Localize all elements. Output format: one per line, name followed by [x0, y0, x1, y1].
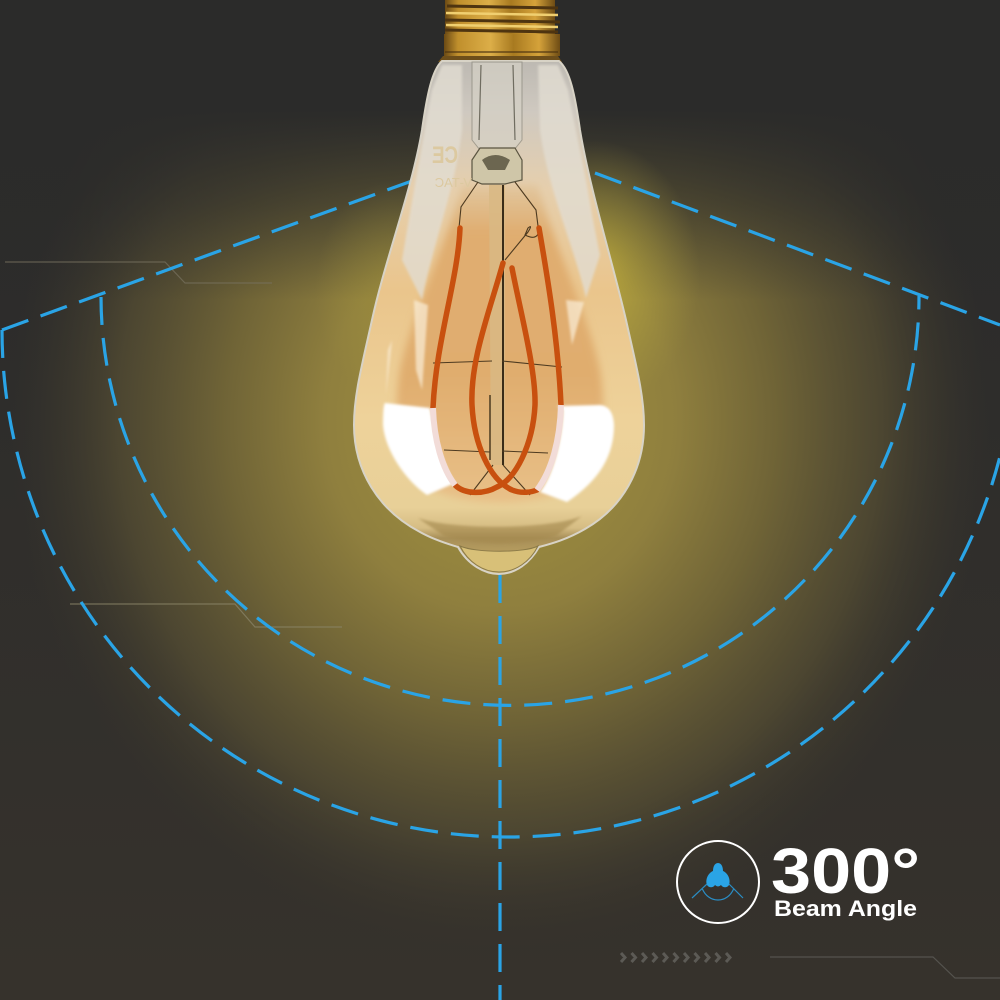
- centre axis: [498, 575, 502, 1000]
- support stem: [489, 185, 505, 465]
- screw base: [438, 0, 562, 62]
- right beam edge: [595, 173, 1000, 325]
- support wires: [433, 182, 562, 495]
- left beam edge: [2, 178, 420, 330]
- glass envelope: [354, 61, 644, 574]
- decorative circuit line: lower left: [70, 604, 342, 627]
- CE marking: CE: [432, 142, 458, 169]
- white glare left: [383, 403, 455, 495]
- decorative circuit line: bottom right: [770, 957, 1000, 978]
- pale streaks: [386, 300, 584, 395]
- filament mount: [472, 148, 522, 184]
- exhaust tube: [472, 62, 522, 150]
- stat: 300 degrees: 300°: [771, 835, 920, 907]
- side reflections: [402, 65, 600, 300]
- icon: beam angle: [677, 841, 759, 923]
- amber core of glass: [397, 185, 603, 502]
- white glare right: [540, 405, 614, 502]
- decorative circuit line: upper left: [5, 262, 272, 283]
- outer arc: [2, 330, 1000, 837]
- glass tip: [460, 546, 538, 572]
- brand marking: V-TAC: [435, 175, 472, 190]
- orange filament: [433, 228, 561, 492]
- filament glow section: [433, 405, 561, 490]
- inner arc: [101, 296, 919, 705]
- stat label: Beam Angle: Beam Angle: [774, 896, 917, 921]
- light bulb: [354, 0, 644, 574]
- decorative chevrons: [621, 953, 730, 962]
- base rim of glass: [418, 516, 582, 544]
